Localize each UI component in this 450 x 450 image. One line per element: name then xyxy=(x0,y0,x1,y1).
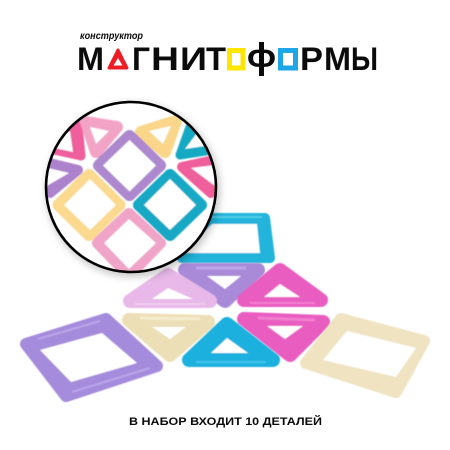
piece: blue trapezoid xyxy=(182,217,270,258)
piece: beige square xyxy=(306,319,424,392)
piece: magenta triangle upper xyxy=(244,270,321,303)
logo: title МАГНИТОФОРМЫ: Ф xyxy=(247,41,276,77)
piece: purple square xyxy=(26,319,157,396)
piece: beige triangle xyxy=(129,318,208,355)
lens: teal triangle right xyxy=(180,127,225,155)
logo: subtitle: конструктор xyxy=(80,30,143,42)
logo: title МАГНИТОФОРМЫ: Г xyxy=(132,41,150,77)
logo: title МАГНИТОФОРМЫ: Н xyxy=(151,41,179,77)
logo: title МАГНИТОФОРМЫ: Т xyxy=(206,41,226,77)
lens: purple square xyxy=(99,136,160,195)
lens: magenta triangle right xyxy=(182,160,215,193)
lens: purple triangle left xyxy=(40,162,78,193)
caption: В НАБОР ВХОДИТ 10 ДЕТАЛЕЙ xyxy=(129,415,322,428)
lens: teal square xyxy=(139,175,201,235)
piece: purple triangle xyxy=(185,268,258,301)
magnifier shadow xyxy=(46,103,220,277)
lens: yellow square xyxy=(58,175,120,235)
logo: title МАГНИТОФОРМЫ: И xyxy=(180,41,207,77)
piece: magenta triangle lower xyxy=(244,318,323,355)
logo: title МАГНИТОФОРМЫ: Р xyxy=(300,41,323,77)
piece: blue triangle xyxy=(189,324,273,362)
logo: title МАГНИТОФОРМЫ xyxy=(77,41,378,77)
lens: magenta triangle left xyxy=(40,125,81,156)
magnifier circle xyxy=(40,102,225,275)
logo: title МАГНИТОФОРМЫ: М xyxy=(324,41,351,77)
lens: pink triangle xyxy=(86,122,117,152)
lens: pink square xyxy=(98,214,160,275)
logo: title МАГНИТОФОРМЫ: М xyxy=(77,41,104,77)
logo: title МАГНИТОФОРМЫ: Ы xyxy=(351,41,378,77)
lens: yellow triangle xyxy=(141,121,176,152)
piece: light pink triangle xyxy=(130,275,210,304)
